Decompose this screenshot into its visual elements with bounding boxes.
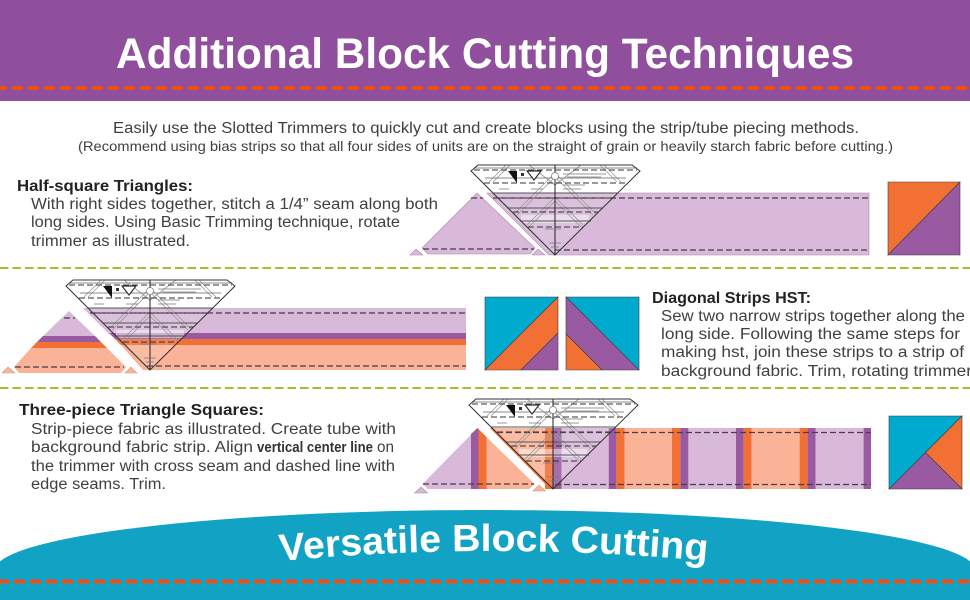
diagram: diagonal strips cutting <box>2 280 466 373</box>
header banner <box>0 0 970 101</box>
intro text <box>78 120 893 154</box>
diagram: three-piece triangle cutting <box>414 399 871 493</box>
ruler <box>471 165 640 255</box>
instructions: diagonal strips: making hst, join these strips to a strip of <box>661 344 965 361</box>
instructions: half-square triangles <box>31 196 438 250</box>
cut triangle <box>14 311 126 373</box>
panel: half-square triangles text <box>17 178 438 250</box>
heading: half-square triangles: Half-square Triangles: <box>17 178 193 195</box>
instructions: three-piece triangle squares: on <box>377 439 394 456</box>
diagram: half-square triangle cutting <box>410 165 869 255</box>
panel: diagonal strips text <box>652 290 970 380</box>
small triangles <box>410 249 545 255</box>
finished blocks: diagonal strips <box>485 297 639 370</box>
instructions: three-piece triangle squares: background fabric strip. Align <box>31 439 253 456</box>
instructions: three-piece triangle squares: the trimmer with cross seam and dashed line with <box>31 458 395 475</box>
ruler <box>66 280 235 370</box>
striped strip <box>83 308 466 370</box>
small triangles <box>414 485 546 493</box>
title: Additional Block Cutting Techniques <box>116 30 854 78</box>
block two <box>566 297 639 370</box>
panel: three-piece triangle squares text <box>19 402 396 493</box>
cut triangle <box>422 193 535 254</box>
instructions: three-piece triangle squares: edge seams. Trim. <box>31 476 166 493</box>
instructions: diagonal strips: long side. Following the same steps for <box>661 326 960 343</box>
finished block: half-square triangle <box>888 182 960 255</box>
footer banner <box>0 510 970 600</box>
instructions: half-square triangles: trimmer as illustrated. <box>31 233 190 250</box>
lavender strip <box>487 193 869 255</box>
instructions: diagonal strips: background fabric. Trim, rotating trimmer <box>661 363 970 380</box>
small triangles <box>2 367 137 373</box>
intro text: (Recommend using bias strips so that all four sides of units are on the straight of grain or heavily starch fabric before cutting.) <box>78 138 893 154</box>
cut triangle <box>422 428 534 489</box>
heading: diagonal strips: Diagonal Strips HST: <box>652 290 811 307</box>
instructions: diagonal strips: Sew two narrow strips together along the <box>661 308 965 325</box>
heading: three-piece triangle squares: Three-piece Triangle Squares: <box>19 402 264 419</box>
pieced tube strip <box>490 428 871 489</box>
finished block: three-piece triangle <box>889 416 962 489</box>
instructions: diagonal strips <box>661 308 970 380</box>
instructions: three-piece triangle squares <box>31 421 396 493</box>
footer title: Versatile Block Cutting <box>278 524 706 568</box>
instructions: half-square triangles: long sides. Using Basic Trimming technique, rotate <box>31 214 400 231</box>
ruler <box>469 399 638 489</box>
block one <box>485 297 558 370</box>
instructions: three-piece triangle squares: Strip-piece fabric as illustrated. Create tube with <box>31 421 396 438</box>
instructions: three-piece triangle squares: vertical center line <box>257 440 373 456</box>
instructions: half-square triangles: With right sides together, stitch a 1/4” seam along both <box>31 196 438 213</box>
intro text: Easily use the Slotted Trimmers to quickly cut and create blocks using the strip/tube piecing methods. <box>113 120 859 137</box>
